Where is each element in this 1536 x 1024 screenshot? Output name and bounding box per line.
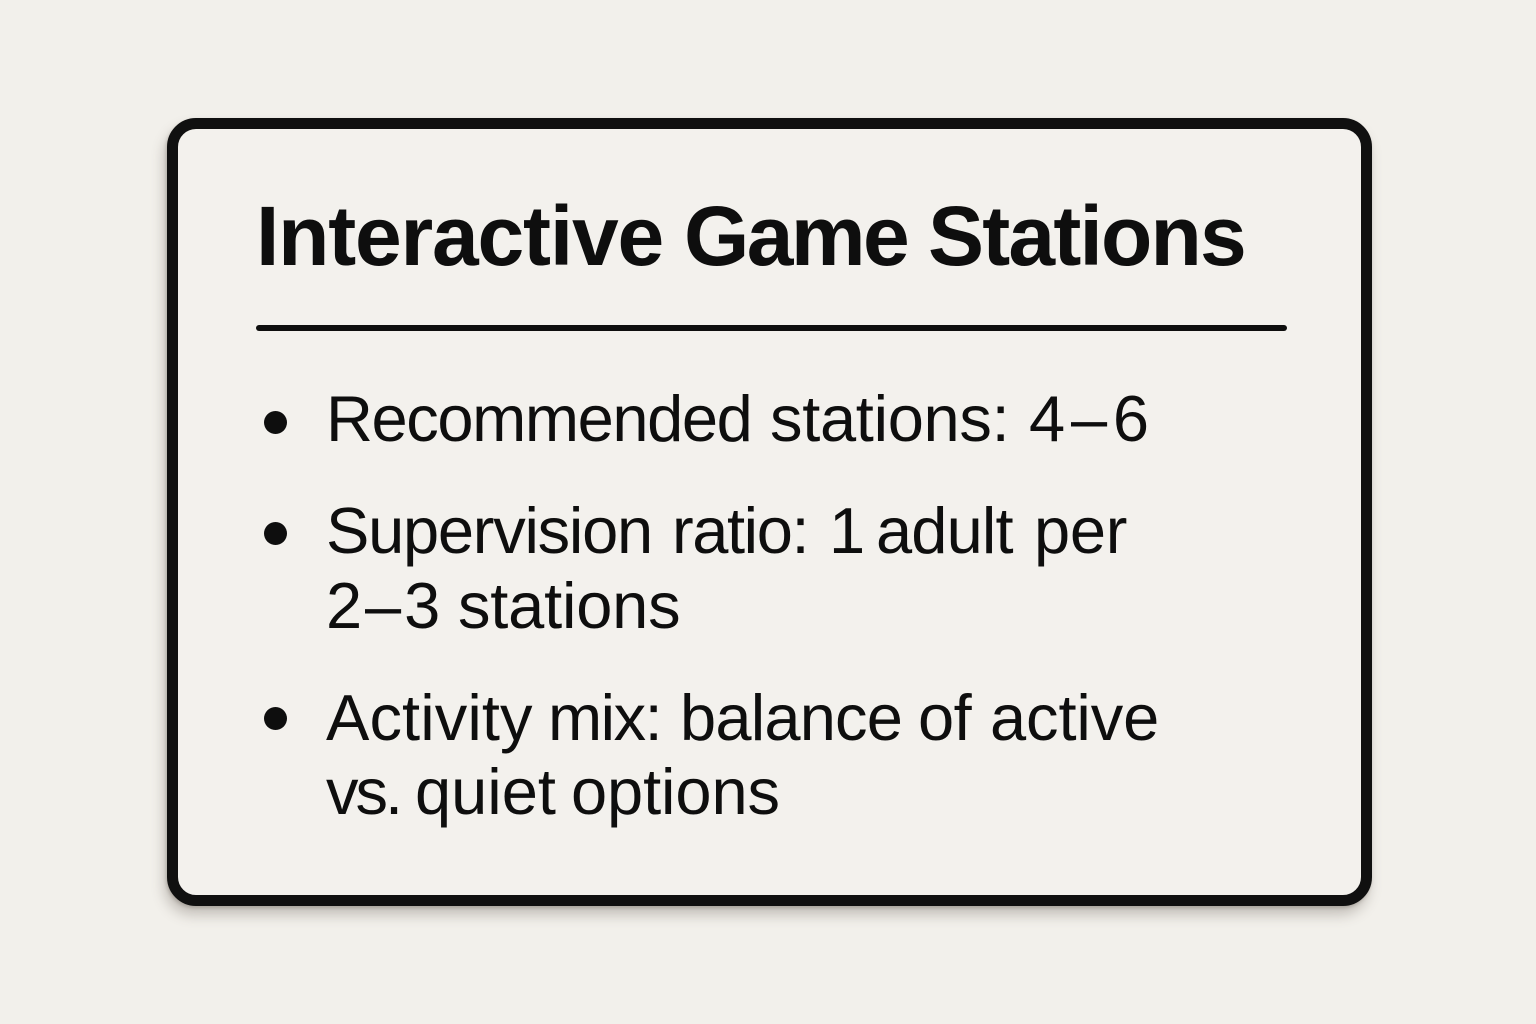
text: recommended stations: Recommended [326,382,751,455]
text: supervision ratio line 2: stations [458,569,680,642]
title: Game [684,189,907,283]
panel: card [167,118,1372,906]
text: supervision ratio line 1 [326,494,1127,567]
icon: bullet 3 [264,706,286,730]
text: supervision ratio line 1: ratio: [672,494,808,567]
text: activity mix line 2: quiet [415,755,556,828]
text: supervision ratio line 1: 1 [829,494,865,567]
text: supervision ratio line 2: 2–3 [326,569,443,642]
text: recommended stations [326,382,1155,455]
title [256,189,1245,283]
title: Stations [928,189,1245,283]
title: Interactive [256,189,663,283]
text: activity mix line 1: balance [680,681,902,754]
text: activity mix line 1: active [990,681,1159,754]
text: activity mix line 1 [326,681,1159,754]
text: activity mix line 2: vs. [326,755,400,828]
text: activity mix line 1: of [918,681,971,754]
text: supervision ratio line 1: Supervision [326,494,652,567]
text: activity mix line 1: mix: [548,681,661,754]
icon: bullet 1 [264,410,286,434]
divider rule [256,325,1287,330]
text: activity mix line 2 [326,755,780,828]
text: activity mix line 1: Activity [326,681,533,754]
text: supervision ratio line 1: per [1034,494,1127,567]
text: recommended stations: stations: [770,382,1009,455]
text: recommended stations: 4–6 [1029,382,1155,455]
text: activity mix line 2: options [571,755,780,828]
text: supervision ratio line 1: adult [876,494,1013,567]
text: supervision ratio line 2 [326,569,680,642]
icon: bullet 2 [264,522,286,544]
